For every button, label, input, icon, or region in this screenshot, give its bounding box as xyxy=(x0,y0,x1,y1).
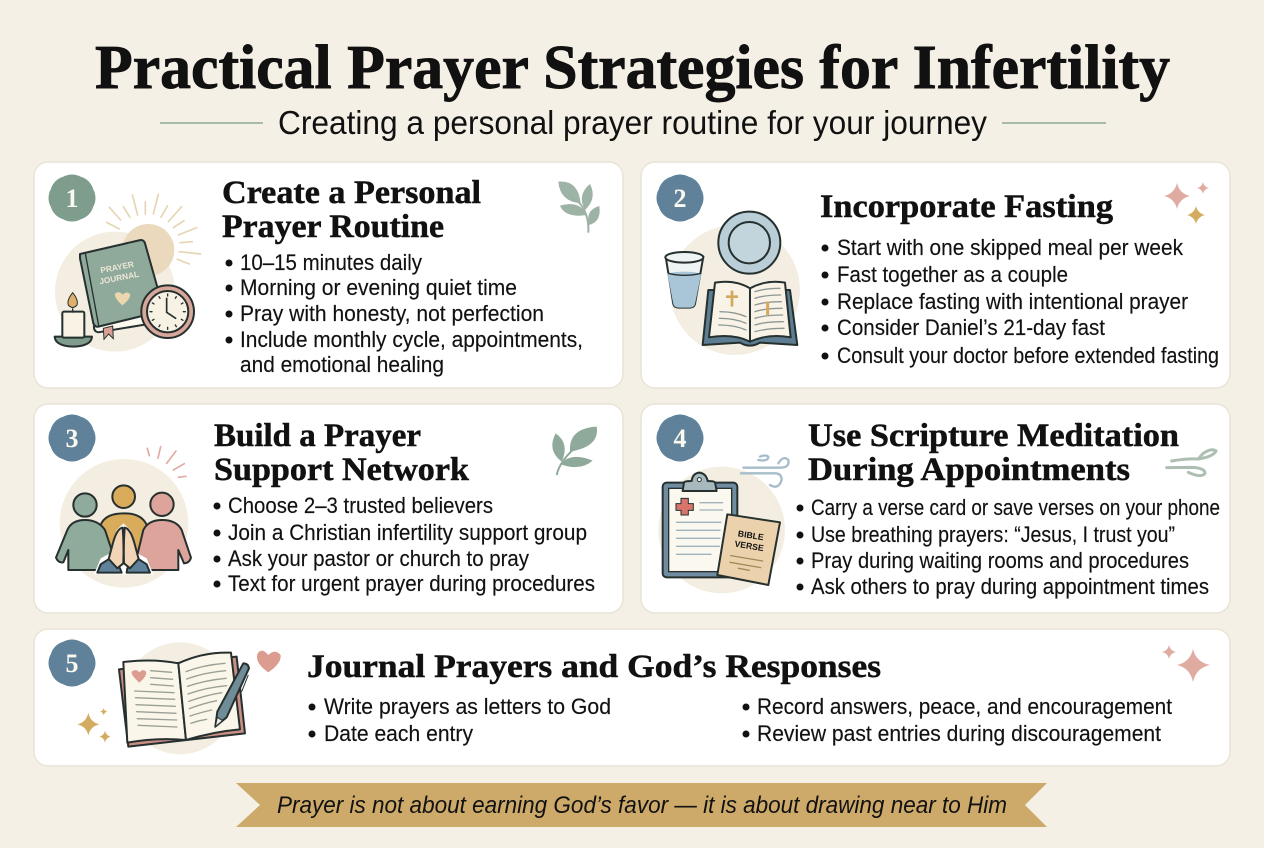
bullet list: 10–15 minutes daily xyxy=(240,250,422,275)
panel: incorporate fasting xyxy=(641,162,1230,388)
icon: plate, water glass and open Bible xyxy=(665,212,800,355)
bullet list: left column xyxy=(308,694,611,746)
icon: clipboard, Bible verse card and breath xyxy=(658,455,789,593)
number badge 2: 2 xyxy=(674,184,686,213)
number badge 4: 4 xyxy=(674,424,686,453)
bullet list xyxy=(796,495,1220,599)
bullet list: and emotional healing xyxy=(240,352,444,377)
heading: Prayer Routine xyxy=(222,209,444,245)
card background xyxy=(34,162,623,388)
bullet list: Ask your pastor or church to pray xyxy=(228,546,529,571)
heading xyxy=(808,418,1179,488)
icon: prayer journal, candle and clock: PRAYER xyxy=(99,259,135,275)
number badge 3: 3 xyxy=(66,424,78,453)
bullet list xyxy=(214,493,595,596)
number badge 1: 1 xyxy=(66,184,78,213)
bullet list xyxy=(822,235,1219,368)
icon: breath swirl xyxy=(1167,450,1216,476)
icon: leaf sprig xyxy=(552,427,597,475)
title: Practical Prayer Strategies for Infertility xyxy=(95,34,1170,102)
bullet list: Start with one skipped meal per week xyxy=(837,235,1184,260)
heading: Journal Prayers and God’s Responses xyxy=(307,649,881,685)
bullet list: Consult your doctor before extended fasting xyxy=(837,343,1219,368)
bullet list: Include monthly cycle, appointments, xyxy=(240,327,583,352)
bullet list: Text for urgent prayer during procedures xyxy=(228,571,595,596)
icon: leaf sprig xyxy=(558,182,600,233)
icon: clipboard, Bible verse card and breath: BIBLE xyxy=(737,528,765,542)
icon: open journal and pen xyxy=(77,642,281,754)
bullet list: Use breathing prayers: “Jesus, I trust you” xyxy=(811,522,1175,547)
bullet list: Fast together as a couple xyxy=(837,262,1068,287)
heading xyxy=(222,175,481,245)
bullet list: Ask others to pray during appointment times xyxy=(811,574,1209,599)
bullet list: right column: Review past entries during discouragement xyxy=(757,721,1161,746)
heading: Incorporate Fasting xyxy=(820,189,1114,225)
bullet list: Consider Daniel’s 21-day fast xyxy=(837,315,1105,340)
bullet list: right column: Record answers, peace, and encouragement xyxy=(757,694,1172,719)
number badge 1 xyxy=(49,175,95,221)
icon: clipboard, Bible verse card and breath: VERSE xyxy=(734,539,765,553)
bullet list: left column: Write prayers as letters to God xyxy=(324,694,611,719)
banner: closing quote xyxy=(236,783,1047,827)
panel: build a prayer support network xyxy=(34,404,623,613)
card background xyxy=(34,629,1230,766)
heading: Create a Personal xyxy=(222,175,481,211)
heading: During Appointments xyxy=(808,452,1130,488)
heading: Support Network xyxy=(214,452,470,488)
bullet list: Replace fasting with intentional prayer xyxy=(837,289,1188,314)
card background xyxy=(34,404,623,613)
bullet list xyxy=(226,250,583,377)
bullet list: Pray during waiting rooms and procedures xyxy=(811,548,1189,573)
icon: sparkles xyxy=(1164,182,1209,224)
heading: Build a Prayer xyxy=(214,418,421,454)
heading xyxy=(214,418,470,488)
icon: three people praying xyxy=(56,447,191,588)
icon: prayer journal, candle and clock: JOURNAL xyxy=(98,269,140,286)
bullet list: right column xyxy=(742,694,1172,746)
panel: scripture meditation during appointments xyxy=(641,404,1230,613)
bullet list: Pray with honesty, not perfection xyxy=(240,301,544,326)
number badge 5 xyxy=(49,640,95,686)
bullet list: left column: Date each entry xyxy=(324,721,473,746)
number badge 3 xyxy=(49,415,95,461)
bullet list: Join a Christian infertility support group xyxy=(228,520,587,545)
number badge 2 xyxy=(657,175,703,221)
card background xyxy=(641,162,1230,388)
icon: sparkles xyxy=(1162,645,1210,682)
card background xyxy=(641,404,1230,613)
bullet list: Morning or evening quiet time xyxy=(240,275,517,300)
heading: Use Scripture Meditation xyxy=(808,418,1179,454)
panel: journal prayers and God's responses xyxy=(34,629,1230,766)
icon: prayer journal, candle and clock xyxy=(55,194,201,352)
bullet list: Choose 2–3 trusted believers xyxy=(228,493,493,518)
number badge 4 xyxy=(657,415,703,461)
panel: create a personal prayer routine xyxy=(34,162,623,388)
banner: closing quote: Prayer is not about earning God’s favor — it is about drawing near to Him xyxy=(277,792,1007,819)
number badge 5: 5 xyxy=(66,649,78,678)
subtitle: Creating a personal prayer routine for your journey xyxy=(278,104,987,141)
